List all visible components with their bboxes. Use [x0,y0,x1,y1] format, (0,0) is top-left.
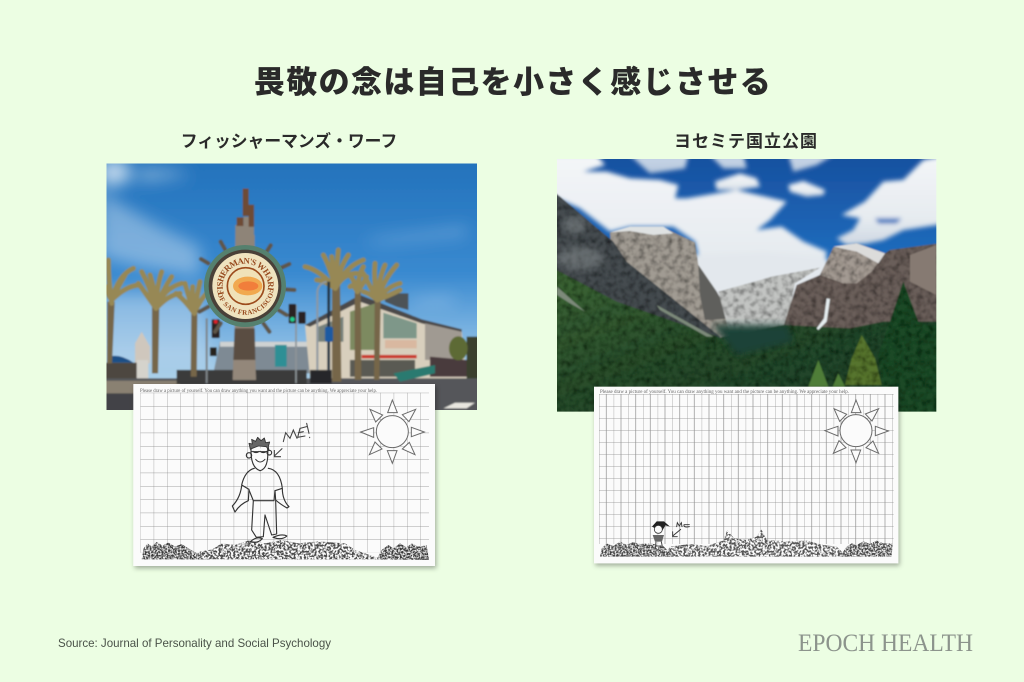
heading: Fisherman's Wharf: フィッシャーマンズ・ワーフ [181,131,397,151]
lamp post and traffic lights [317,282,327,370]
photo: Yosemite valley [550,152,947,418]
heading: Yosemite: ヨセミテ国立公園 [674,132,818,151]
palm trees [107,283,381,382]
right cliffs [784,242,936,330]
arrow and handwritten Me [673,523,689,537]
card paper [133,384,435,566]
grass right [377,543,429,560]
left awning and kiosk [108,356,133,363]
drawing card: small self [594,387,898,563]
sign lettering: FISHERMAN'S WHARF [217,258,274,296]
instruction text: Please draw a picture of yourself. You can draw anything you want and the picture can be anything. We appreciate your help. [600,390,849,395]
street level [106,377,477,410]
person figure [232,437,289,542]
logo: Epoch Health: EPOCH HEALTH [798,628,973,657]
ship wheel spokes [199,242,294,332]
snowy mid mountain [718,267,820,330]
small person figure [652,521,670,548]
title: 畏敬の念は自己を小さく感じさせる [254,65,772,100]
waterfall [817,298,830,330]
source note: Source: Journal of Personality and Social Psychology [58,636,331,650]
pole [233,217,256,380]
sun [361,400,424,463]
grass left [600,542,673,557]
grass right [840,541,893,557]
instruction text: Please draw a picture of yourself. You can draw anything you want and the picture can be anything. We appreciate your help. [140,389,377,394]
grass middle [192,540,382,559]
wheel sign [204,245,286,327]
handwritten ME! [283,423,310,442]
clouds [557,159,936,302]
building [305,297,467,378]
sun [825,400,888,463]
conifers [879,282,936,412]
pale rock patches [557,217,603,270]
photo: Fisherman's Wharf sign [106,164,477,410]
arrow to figure [274,448,282,457]
distant harbor buildings [213,342,310,373]
drawing card: large self [133,384,435,566]
grass middle [663,529,847,557]
granite cliff [610,228,732,342]
grass left [142,542,203,559]
forest [557,270,936,412]
card paper [594,387,898,563]
valley haze behind peaks [693,252,837,342]
left dark mountain [557,193,720,338]
wheel sign: OF SAN FRANCISCO [218,292,273,315]
